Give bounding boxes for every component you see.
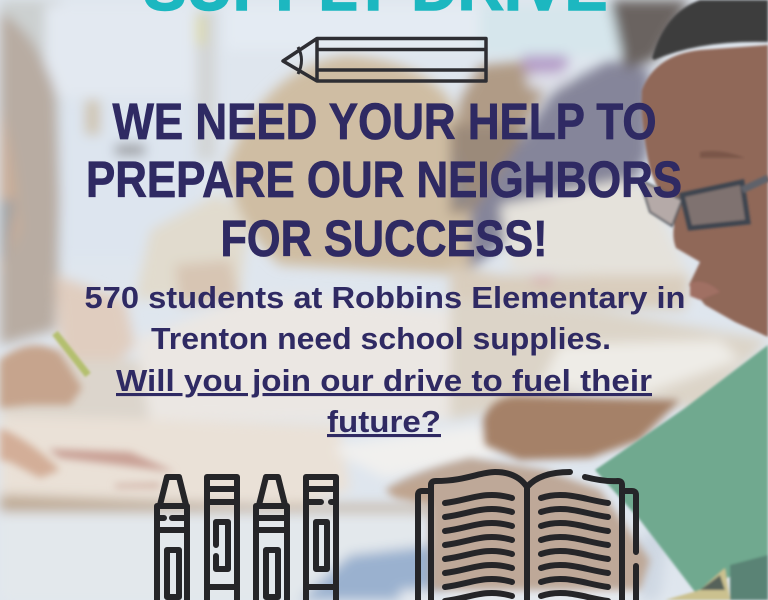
body text: future? <box>327 404 441 439</box>
headline <box>86 93 682 267</box>
green t-shirt <box>595 345 768 592</box>
back area <box>450 60 545 170</box>
crayon 2 <box>207 477 237 600</box>
headline: FOR SUCCESS! <box>220 210 548 267</box>
centre child <box>135 195 250 300</box>
left hand <box>0 345 82 408</box>
crayon 4 <box>306 477 336 600</box>
icon: crayons <box>157 477 336 600</box>
icon: open book <box>418 472 636 600</box>
arm with pencil <box>483 396 680 460</box>
table and papers <box>0 360 160 420</box>
body text: Will you join our drive to fuel their <box>116 363 652 398</box>
red paper marks <box>48 449 175 472</box>
headline: WE NEED YOUR HELP TO <box>112 93 656 150</box>
crayon 3 <box>256 477 287 600</box>
left child <box>0 12 60 345</box>
right page lines <box>541 495 608 600</box>
body text <box>84 280 686 439</box>
crayon 1 <box>157 477 187 600</box>
white sleeve <box>500 180 690 280</box>
right boy <box>642 45 768 337</box>
headline: PREPARE OUR NEIGHBORS <box>86 151 682 208</box>
bracelet <box>55 333 88 375</box>
icon: pencil <box>283 38 486 81</box>
left page lines <box>445 495 512 600</box>
body text: 570 students at Robbins Elementary in <box>84 280 686 315</box>
body text: Trenton need school supplies. <box>151 321 611 356</box>
boy's glasses <box>640 178 768 228</box>
